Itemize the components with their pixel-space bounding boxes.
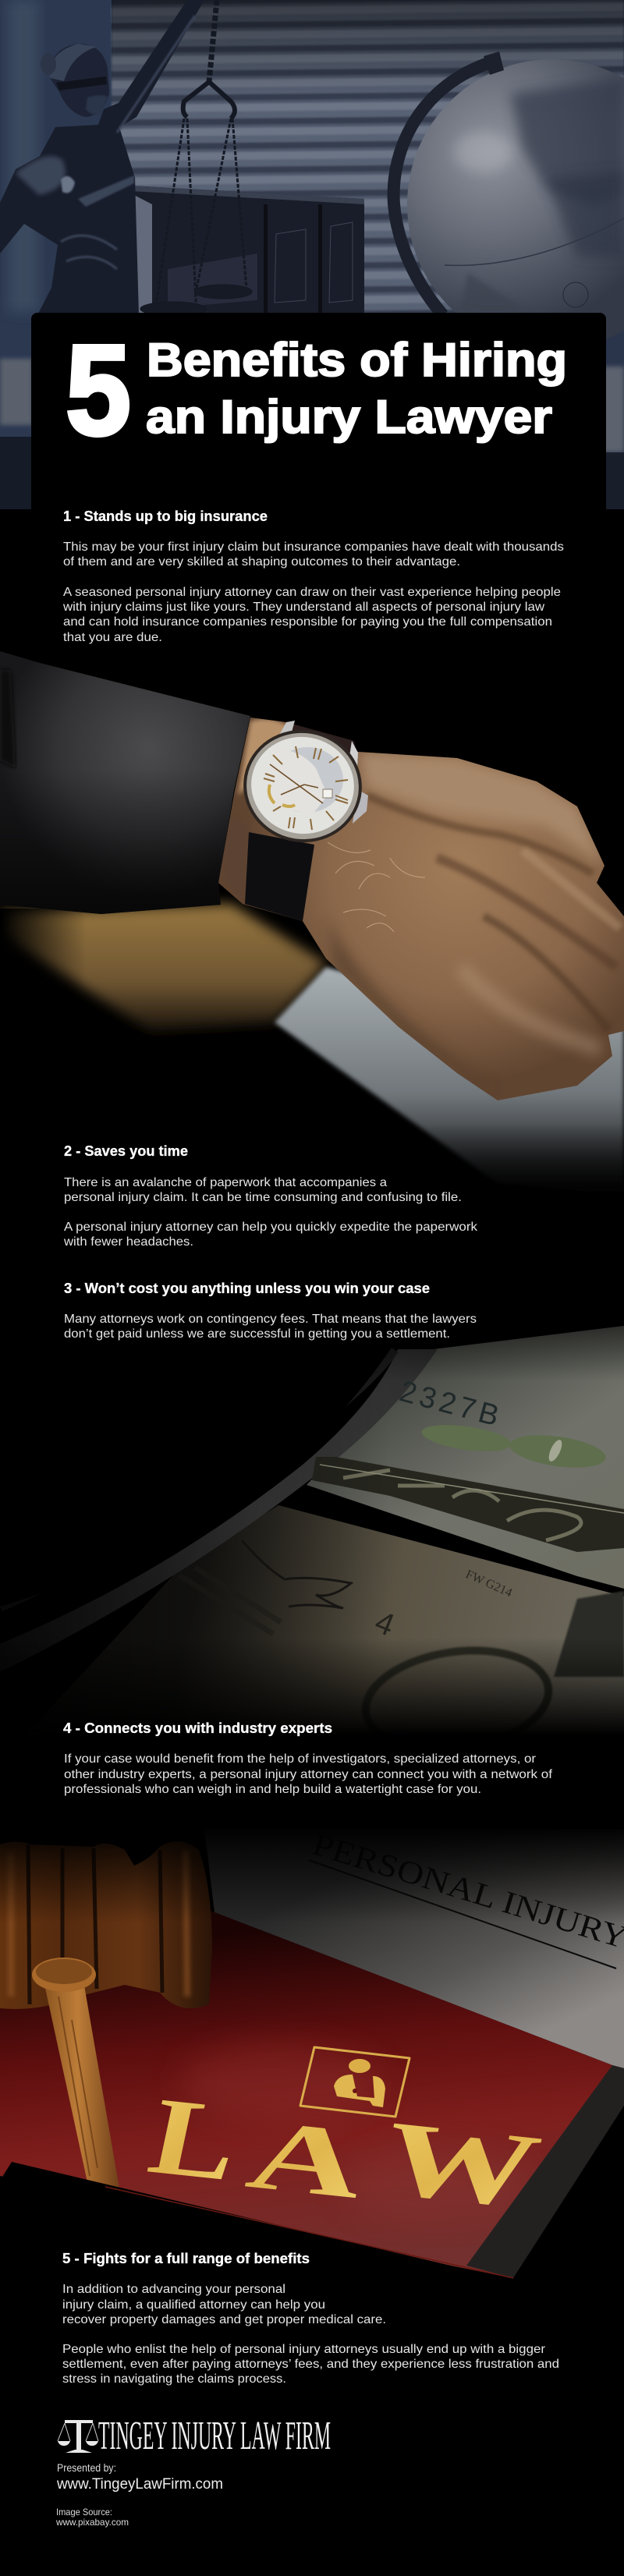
title numeral: 5 bbox=[66, 318, 131, 462]
curled bill edge bbox=[0, 1349, 438, 1672]
footer credits: www.TingeyLawFirm.com bbox=[56, 2476, 223, 2493]
photo: hand with wristwatch bbox=[0, 651, 624, 1285]
benefit 1 text bbox=[62, 508, 564, 644]
photo: lady justice statue, books and globe bbox=[0, 0, 624, 509]
vignette bbox=[0, 1279, 624, 1380]
statue bbox=[0, 0, 204, 315]
red book cover bbox=[0, 1911, 612, 2278]
LAW lettering: W bbox=[373, 2099, 549, 2231]
bill markings: 4 bbox=[370, 1605, 399, 1643]
books bbox=[131, 186, 364, 314]
benefit 5 text: settlement, even after paying attorneys’ fees, and they experience less frustration and bbox=[62, 2358, 559, 2371]
fade at top of image bbox=[0, 1825, 624, 1922]
benefit 2 text: A personal injury attorney can help you quickly expedite the paperwork bbox=[64, 1221, 478, 1234]
gavel handle bbox=[32, 1958, 119, 2188]
benefit 2 text: 2 - Saves you time bbox=[64, 1143, 188, 1159]
benefit 2 text: personal injury claim. It can be time consuming and confusing to file. bbox=[64, 1191, 462, 1204]
black cut-out bbox=[0, 2106, 624, 2332]
benefit 5 text: In addition to advancing your personal bbox=[62, 2283, 285, 2296]
gavel head bbox=[0, 1841, 212, 2009]
title panel bbox=[0, 313, 624, 657]
green numerals bbox=[420, 1420, 608, 1472]
footer credits bbox=[55, 2461, 223, 2528]
upper bill bbox=[307, 1326, 624, 1589]
benefit 5 text bbox=[62, 2251, 559, 2386]
sleeve bbox=[0, 651, 250, 914]
LAW lettering bbox=[140, 2074, 549, 2231]
footer credits: Image Source: bbox=[56, 2507, 112, 2518]
benefit 4 text: professionals who can weigh in and help build a watertight case for you. bbox=[64, 1783, 481, 1796]
hand bbox=[218, 718, 624, 1100]
benefit 1 text: of them and are very skilled at shaping outcomes to their advantage. bbox=[63, 555, 460, 569]
document heading: PERSONAL INJURY bbox=[308, 1826, 624, 1955]
wristwatch bbox=[235, 721, 370, 921]
LAW lettering: A bbox=[239, 2099, 375, 2220]
benefit 5 text: injury claim, a qualified attorney can help you bbox=[62, 2298, 325, 2312]
benefit 5 text: 5 - Fights for a full range of benefits bbox=[62, 2251, 310, 2266]
benefit 3 text: Many attorneys work on contingency fees. That means that the lawyers bbox=[64, 1313, 477, 1326]
benefit 5 text: People who enlist the help of personal injury attorneys usually end up with a bigger bbox=[62, 2343, 546, 2356]
lower bill bbox=[0, 1505, 624, 1763]
signature bbox=[242, 1540, 351, 1608]
serial number: 2327B bbox=[396, 1375, 506, 1434]
benefit 2 text: with fewer headaches. bbox=[63, 1235, 193, 1249]
balance scales bbox=[140, 0, 252, 316]
benefit 4 text: other industry experts, a personal injury attorney can connect you with a network of bbox=[64, 1768, 553, 1781]
benefit 1 text: with injury claims just like yours. They understand all aspects of personal injury law bbox=[62, 601, 544, 614]
photo: dollar bills: FW G214 bbox=[463, 1568, 514, 1600]
benefit 1 text: and can hold insurance companies responsible for paying you the full compensation bbox=[63, 615, 552, 629]
benefit 3 text: don’t get paid unless we are successful in getting you a settlement. bbox=[64, 1327, 450, 1341]
benefit 3 text bbox=[64, 1281, 477, 1341]
benefit 2 text: There is an avalanche of paperwork that accompanies a bbox=[64, 1176, 387, 1189]
title text: Benefits of Hiring bbox=[147, 334, 567, 386]
LAW lettering: L bbox=[140, 2074, 250, 2204]
benefit 5 text: recover property damages and get proper medical care. bbox=[62, 2313, 386, 2326]
laptop bbox=[275, 967, 624, 1196]
icon: scales of justice bbox=[58, 2420, 98, 2453]
ornamental band bbox=[312, 1457, 624, 1552]
photo: dollar bills bbox=[0, 1279, 624, 1829]
benefit 4 text: 4 - Connects you with industry experts bbox=[63, 1720, 332, 1736]
footer credits: www.pixabay.com bbox=[55, 2517, 129, 2528]
title text bbox=[146, 334, 567, 443]
benefit 4 text: If your case would benefit from the help of investigators, specialized attorneys, or bbox=[64, 1752, 537, 1766]
benefit 1 text: 1 - Stands up to big insurance bbox=[63, 508, 268, 524]
treasury seal bbox=[360, 1591, 624, 1761]
footer credits: Presented by: bbox=[57, 2461, 116, 2474]
table bbox=[0, 904, 326, 1041]
title text: an Injury Lawyer bbox=[146, 391, 552, 443]
benefit 1 text: This may be your first injury claim but insurance companies have dealt with thousands bbox=[63, 540, 564, 554]
book spine edge bbox=[466, 2065, 624, 2278]
globe bbox=[394, 51, 624, 349]
photo: gavel on red law book bbox=[0, 1825, 624, 2332]
emblem bbox=[300, 2047, 410, 2117]
logo: Tingey Injury Law Firm bbox=[58, 2414, 331, 2458]
vignette bbox=[0, 437, 31, 509]
benefit 5 text: stress in navigating the claims process. bbox=[62, 2372, 286, 2386]
infographic canvas: TINGEY INJURY LAW FIRM bbox=[98, 2414, 331, 2458]
fade below hand bbox=[0, 1123, 624, 1209]
benefit 1 text: that you are due. bbox=[63, 631, 162, 644]
benefit 1 text: A seasoned personal injury attorney can draw on their vast experience helping people bbox=[63, 586, 561, 599]
benefit 4 text bbox=[63, 1720, 553, 1796]
benefit 2 text bbox=[63, 1143, 478, 1249]
benefit 3 text: 3 - Won’t cost you anything unless you win your case bbox=[64, 1281, 430, 1296]
document paper bbox=[204, 1826, 624, 2068]
